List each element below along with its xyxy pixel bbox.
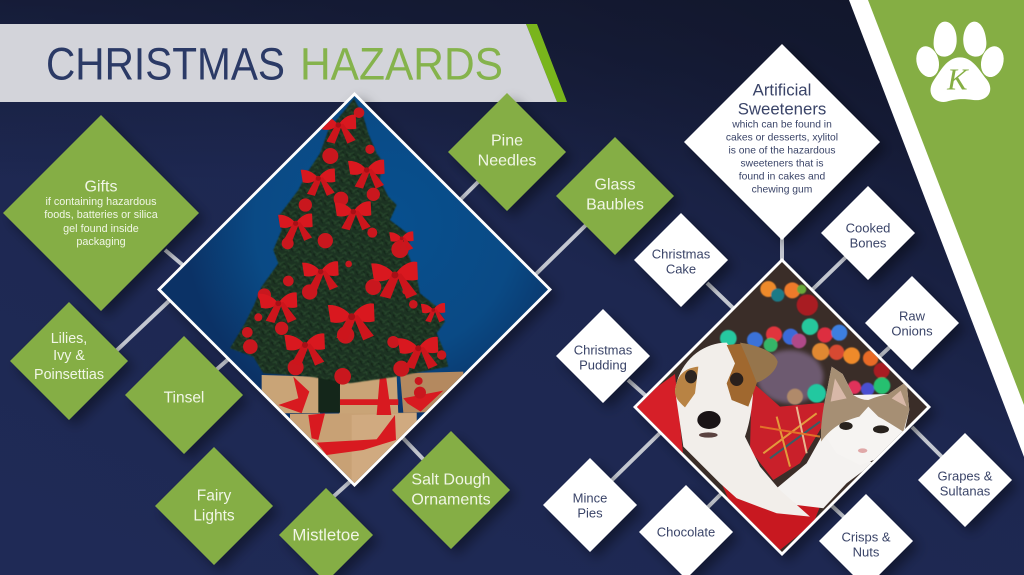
corner panel with logo xyxy=(849,0,1024,457)
red blanket xyxy=(637,374,683,453)
diamond: Salt Dough Ornaments: Salt Dough xyxy=(411,472,491,488)
diamond: Grapes & Sultanas: Sultanas xyxy=(940,484,991,498)
diamond: Fairy Lights xyxy=(155,447,273,565)
diamond: Mince Pies: Mince xyxy=(573,490,607,506)
diamond: Artificial Sweeteners: cakes or desserts, xylitol xyxy=(726,132,838,144)
diamond: Artificial Sweeteners: chewing gum xyxy=(752,184,812,196)
diamond: Gifts: gel found inside xyxy=(63,223,139,235)
diamond: Artificial Sweeteners: Sweeteners xyxy=(738,100,826,118)
diamond: Mistletoe xyxy=(279,488,373,575)
diamond: Cooked Bones: Cooked xyxy=(846,220,890,236)
icon: paw logo xyxy=(913,22,1007,102)
baubles xyxy=(242,107,446,399)
diamond: Christmas Cake: Christmas xyxy=(652,246,711,262)
gifts xyxy=(262,372,463,487)
icon: paw logo: K xyxy=(946,62,969,96)
diamond: Christmas Cake: Cake xyxy=(666,262,696,276)
diamond: Christmas Cake xyxy=(634,213,728,307)
cat body xyxy=(777,433,873,508)
cat head xyxy=(822,367,909,465)
bokeh lights xyxy=(720,281,890,405)
diamond: Mince Pies xyxy=(543,458,637,552)
diamond: Tinsel: Tinsel xyxy=(164,390,204,406)
diamond: Cooked Bones xyxy=(821,186,915,280)
diamond: Crisps & Nuts: Nuts xyxy=(853,544,880,560)
diamond: Gifts: if containing hazardous xyxy=(45,196,157,208)
diamond: Crisps & Nuts xyxy=(819,494,913,575)
diamond: Artificial Sweeteners: is one of the hazardous xyxy=(728,146,836,156)
diamond: Mince Pies: Pies xyxy=(577,506,603,520)
diamond: Artificial Sweeteners xyxy=(684,44,880,240)
dog xyxy=(675,343,810,517)
diamond: Lilies: Poinsettias xyxy=(34,367,104,383)
diamond: Artificial Sweeteners: sweeteners that is xyxy=(740,158,824,170)
title: Christmas Hazards: CHRISTMAS xyxy=(46,38,285,90)
title: Christmas Hazards: HAZARDS xyxy=(300,38,503,90)
diamond: Artificial Sweeteners: found in cakes and xyxy=(739,172,825,182)
diamond: Gifts xyxy=(3,115,199,311)
diamond: Fairy Lights: Lights xyxy=(193,508,235,524)
diamond: Lilies: Lilies, xyxy=(51,331,87,347)
diamond: Salt Dough Ornaments xyxy=(392,431,510,549)
diamond: Glass Baubles xyxy=(556,137,674,255)
title banner xyxy=(0,24,567,102)
panel: pets photo xyxy=(620,250,940,560)
title: Christmas Hazards xyxy=(46,38,503,90)
panel: tree photo xyxy=(150,90,560,490)
diamond: Chocolate: Chocolate xyxy=(657,524,715,540)
diamond: Mistletoe: Mistletoe xyxy=(292,526,360,544)
diamond: Crisps & Nuts: Crisps & xyxy=(841,530,891,544)
diamond: Gifts: foods, batteries or silica xyxy=(44,209,158,221)
diamond: Artificial Sweeteners: which can be found in xyxy=(731,120,832,130)
bows xyxy=(259,115,445,369)
diamond: Fairy Lights: Fairy xyxy=(197,488,231,504)
diamond: Tinsel xyxy=(125,336,243,454)
diamond: Gifts: packaging xyxy=(76,236,126,248)
diamond: Glass Baubles: Baubles xyxy=(586,196,644,214)
diamond: Gifts: Gifts xyxy=(85,178,117,196)
diamond: Grapes & Sultanas: Grapes & xyxy=(938,468,993,484)
diamond: Christmas Pudding xyxy=(556,309,650,403)
diamond: Raw Onions xyxy=(865,276,959,370)
diamond: Lilies: Ivy & xyxy=(53,348,85,364)
connector lines xyxy=(115,180,947,518)
diamond: Salt Dough Ornaments: Ornaments xyxy=(411,492,491,508)
tree silhouette xyxy=(230,98,448,383)
diamond: Artificial Sweeteners: Artificial xyxy=(753,80,811,100)
diamond: Pine Needles: Needles xyxy=(478,152,536,170)
diamond: Raw Onions: Raw xyxy=(899,308,926,324)
diamond: Pine Needles: Pine xyxy=(491,132,523,150)
diamond: Glass Baubles: Glass xyxy=(595,176,635,194)
diamond: Raw Onions: Onions xyxy=(891,324,933,338)
diamond: Grapes & Sultanas xyxy=(918,433,1012,527)
diamond: Pine Needles xyxy=(448,93,566,211)
diamond: Christmas Pudding: Pudding xyxy=(579,358,627,372)
diamond: Christmas Pudding: Christmas xyxy=(574,342,633,358)
diamond: Chocolate xyxy=(639,485,733,575)
diamond: Cooked Bones: Bones xyxy=(850,236,887,250)
diamond: Lilies xyxy=(10,302,128,420)
